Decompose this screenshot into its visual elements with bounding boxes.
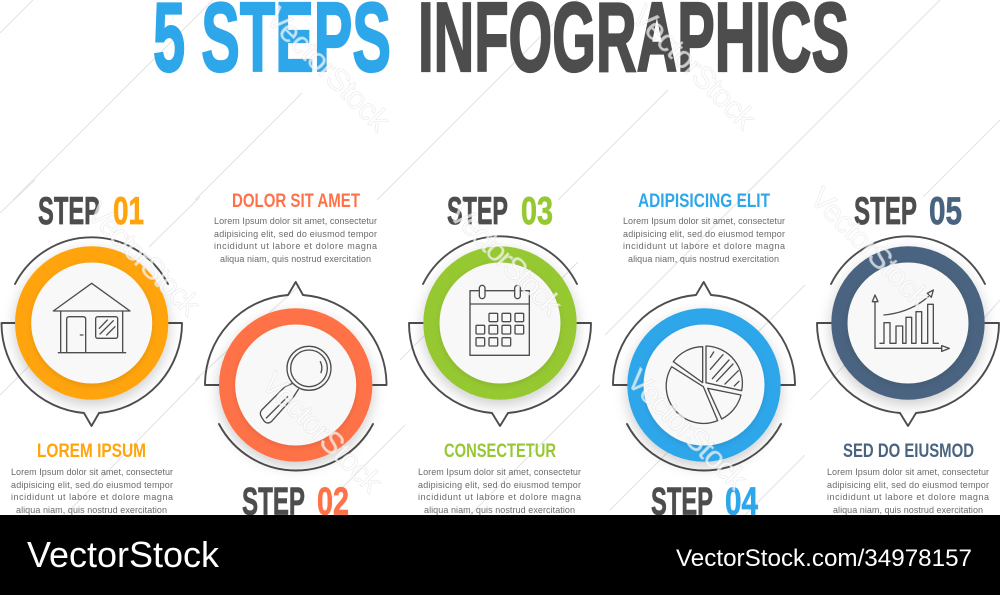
step 5 body text — [827, 467, 989, 515]
step 2 body text: Lorem Ipsum dolor sit amet, consectetur — [214, 216, 377, 226]
footer url: VectorStock.com/34978157 — [676, 545, 972, 572]
step 4 ring — [627, 308, 781, 462]
step 3 body text: adipisicing elit, sed do eiusmod tempor — [418, 480, 581, 490]
step 5 body text: Lorem Ipsum dolor sit amet, consectetur — [827, 467, 989, 477]
step 2 body text: adipisicing elit, sed do eiusmod tempor — [214, 229, 377, 239]
watermark — [80, 0, 938, 500]
step 4 heading: 04 — [725, 480, 758, 524]
step 1 body text: aliqua niam, quis nostrud exercitation — [16, 505, 167, 515]
step 1 — [1, 190, 182, 515]
step 2 body text: aliqua niam, quis nostrud exercitation — [220, 254, 371, 264]
step 1 body text: Lorem Ipsum dolor sit amet, consectetur — [11, 467, 173, 477]
step 3 body text — [418, 467, 581, 515]
step 3 body text: Lorem Ipsum dolor sit amet, consectetur — [418, 467, 581, 477]
step 4 outline — [613, 282, 795, 471]
step 1 heading: 01 — [113, 190, 144, 233]
step 1 body text: incididunt ut labore et dolore magna — [11, 492, 173, 502]
step 4 label: ADIPISICING ELIT — [638, 190, 770, 212]
watermark: VectorStock — [259, 0, 397, 138]
step 2 heading: STEP — [242, 480, 305, 524]
footer bar — [0, 515, 1000, 595]
watermark: VectorStock — [625, 0, 763, 136]
step 5 heading: STEP — [854, 190, 917, 233]
step 3 body text: incididunt ut labore et dolore magna — [418, 492, 581, 502]
step 2 outline — [205, 282, 387, 471]
step 3 heading: 03 — [521, 190, 553, 233]
step 2 ring — [219, 308, 372, 462]
footer logo: VectorStock — [27, 534, 220, 575]
step 4 body text — [623, 216, 785, 264]
step 4 body text: incididunt ut labore et dolore magna — [623, 241, 785, 251]
step 5 body text: incididunt ut labore et dolore magna — [827, 492, 989, 502]
step 5 outline — [817, 236, 999, 426]
step 3 outline — [409, 236, 591, 426]
icon: magnifier — [260, 346, 331, 423]
step 5 body text: aliqua niam, quis nostrud exercitation — [833, 505, 983, 515]
step 1 body text: adipisicing elit, sed do eiusmod tempor — [11, 480, 173, 490]
watermark: VectorStock — [80, 195, 208, 323]
step 2 body text: incididunt ut labore et dolore magna — [214, 241, 377, 251]
step 2 — [205, 190, 387, 524]
step 3 body text: aliqua niam, quis nostrud exercitation — [424, 505, 575, 515]
watermark: VectorStock — [255, 365, 390, 500]
step 3 heading: STEP — [447, 190, 508, 233]
step 1 outline — [1, 237, 182, 426]
step 4 body text: adipisicing elit, sed do eiusmod tempor — [623, 229, 785, 239]
title — [153, 0, 849, 92]
icon: house — [53, 283, 130, 353]
icon: pie chart — [666, 346, 742, 423]
step 3 — [409, 190, 591, 515]
step 5 ring — [831, 246, 985, 400]
watermark: VectorStock — [803, 180, 938, 315]
step 1 body text — [11, 467, 173, 515]
step 4 body text: Lorem Ipsum dolor sit amet, consectetur — [623, 216, 785, 226]
step 4 heading: STEP — [651, 480, 713, 524]
icon: growth chart — [872, 290, 949, 351]
step 5 body text: adipisicing elit, sed do eiusmod tempor — [827, 480, 989, 490]
step 3 label: CONSECTETUR — [444, 440, 556, 462]
step 3 ring — [423, 246, 577, 400]
step 4 body text: aliqua niam, quis nostrud exercitation — [628, 254, 779, 264]
watermark: VectorStock — [442, 195, 570, 323]
icon: calendar — [470, 285, 529, 355]
step 5 — [817, 190, 999, 515]
step 2 heading: 02 — [317, 480, 349, 524]
step 1 heading: STEP — [38, 190, 100, 233]
step 1 label: LOREM IPSUM — [37, 440, 146, 462]
watermark: VectorStock — [620, 362, 755, 497]
step 1 ring — [15, 246, 168, 400]
step 2 label: DOLOR SIT AMET — [232, 190, 360, 212]
step 2 body text — [214, 216, 377, 264]
step 4 — [613, 190, 795, 524]
step 5 heading: 05 — [929, 190, 962, 233]
